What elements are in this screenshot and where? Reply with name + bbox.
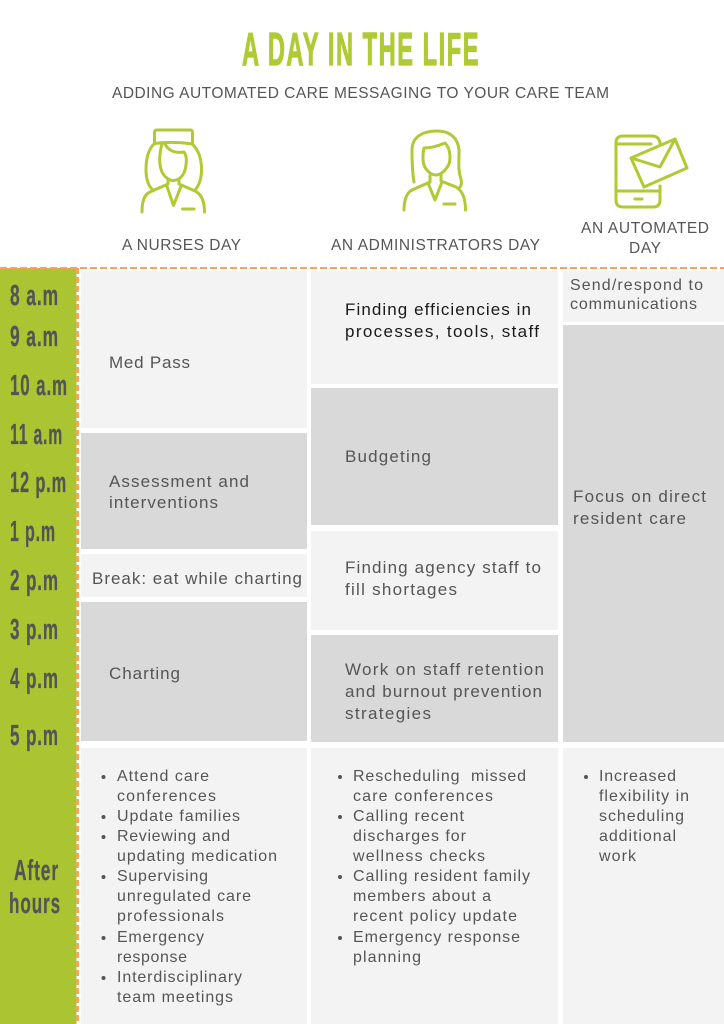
automated panel: after hours: additional xyxy=(599,828,676,845)
administrator panel: retention: and burnout prevention xyxy=(345,682,542,701)
administrator panel: retention: strategies xyxy=(345,704,431,723)
administrator panel: after hours: Calling resident family xyxy=(353,868,530,885)
column heading: automated: AN AUTOMATED xyxy=(581,220,709,237)
nurse panel: after hours: unregulated care xyxy=(117,888,251,905)
nurse panel: charting xyxy=(81,602,307,741)
administrator panel: agency staff: fill shortages xyxy=(345,580,457,599)
automated panel: after hours: flexibility in xyxy=(599,788,689,805)
administrator panel: after hours: discharges for xyxy=(353,828,467,845)
time sidebar: 8 a.m xyxy=(10,280,59,312)
administrator panel: after hours: planning xyxy=(353,949,421,966)
time sidebar: 2 p.m xyxy=(10,565,59,597)
automated panel: after hours: Increased xyxy=(599,768,676,785)
automated panel: after hours: scheduling xyxy=(599,808,684,825)
time sidebar: 9 a.m xyxy=(10,321,59,353)
nurse panel: after hours: updating medication xyxy=(117,848,277,865)
administrator panel: retention xyxy=(311,635,558,742)
automated panel: direct resident care: Focus on direct xyxy=(573,487,706,506)
nurse panel: after hours: Interdisciplinary xyxy=(117,969,242,986)
subtitle: ADDING AUTOMATED CARE MESSAGING TO YOUR CARE TEAM xyxy=(112,85,609,102)
nurse panel: break xyxy=(81,554,307,597)
administrator panel: after hours: members about a xyxy=(353,888,491,905)
automated panel: direct resident care: resident care xyxy=(573,509,686,528)
administrator panel: after hours: wellness checks xyxy=(352,848,485,865)
nurse panel: charting: Charting xyxy=(109,664,180,683)
automated panel: direct resident care xyxy=(563,325,724,742)
automated panel: after hours: work xyxy=(598,848,637,865)
column heading: automated: DAY xyxy=(629,240,661,257)
nurse panel: assessment: interventions xyxy=(109,493,218,512)
administrator panel: after hours: care conferences xyxy=(353,788,493,805)
nurse panel: after hours: Supervising xyxy=(117,868,208,885)
administrator panel: retention: Work on staff retention xyxy=(345,660,544,679)
nurse panel: after hours: professionals xyxy=(117,908,224,925)
time sidebar: 5 p.m xyxy=(10,720,59,752)
administrator panel: after hours: recent policy update xyxy=(353,908,517,925)
administrator panel: after hours: Calling recent xyxy=(353,808,465,825)
administrator panel: after hours xyxy=(311,748,558,1024)
time sidebar: 10 a.m xyxy=(10,370,68,402)
administrator panel: after hours: Rescheduling missed xyxy=(353,768,526,785)
time sidebar xyxy=(0,268,76,1024)
time sidebar: After xyxy=(14,855,59,887)
icon: administrator xyxy=(404,131,466,210)
nurse panel: after hours: conferences xyxy=(117,788,216,805)
time sidebar: hours xyxy=(9,888,61,920)
time sidebar: 4 p.m xyxy=(10,663,59,695)
automated panel: communications: communications xyxy=(570,296,697,313)
nurse panel: after hours: Update families xyxy=(117,808,240,825)
nurse panel: assessment xyxy=(81,433,307,549)
nurse panel: after hours: Emergency xyxy=(117,929,204,946)
automated panel: communications xyxy=(563,271,724,322)
administrator panel: budgeting: Budgeting xyxy=(345,447,431,466)
time sidebar: 11 a.m xyxy=(10,419,63,451)
automated panel: after hours xyxy=(563,748,724,1024)
column heading: administrator: AN ADMINISTRATORS DAY xyxy=(331,237,540,254)
administrator panel: agency staff xyxy=(311,531,558,630)
column heading: automated xyxy=(581,220,709,257)
nurse panel: assessment: Assessment and xyxy=(109,472,249,491)
administrator panel: efficiencies: Finding efficiencies in xyxy=(345,300,531,319)
nurse panel: after hours: team meetings xyxy=(117,989,233,1006)
icon: nurse xyxy=(142,130,204,212)
column heading: nurse: A NURSES DAY xyxy=(122,237,241,254)
administrator panel: efficiencies: processes, tools, staff xyxy=(345,322,539,341)
automated panel: communications: Send/respond to xyxy=(570,277,703,294)
administrator panel: agency staff: Finding agency staff to xyxy=(345,558,541,577)
icon: phone with envelope xyxy=(616,136,687,207)
administrator panel: efficiencies xyxy=(311,271,558,384)
nurse panel: after hours xyxy=(81,748,307,1024)
nurse panel: after hours: Attend care xyxy=(117,768,209,785)
nurse panel: after hours: response xyxy=(117,949,187,966)
nurse panel: med pass xyxy=(81,271,307,428)
time sidebar: 3 p.m xyxy=(10,614,59,646)
administrator panel: after hours: Emergency response xyxy=(353,929,520,946)
nurse panel: after hours: Reviewing and xyxy=(117,828,230,845)
title: A DAY IN THE LIFE xyxy=(242,23,480,75)
nurse panel: break: Break: eat while charting xyxy=(92,569,302,588)
time sidebar: 1 p.m xyxy=(10,516,56,548)
administrator panel: budgeting xyxy=(311,388,558,525)
nurse panel: med pass: Med Pass xyxy=(109,353,190,372)
time sidebar: 12 p.m xyxy=(10,467,67,499)
